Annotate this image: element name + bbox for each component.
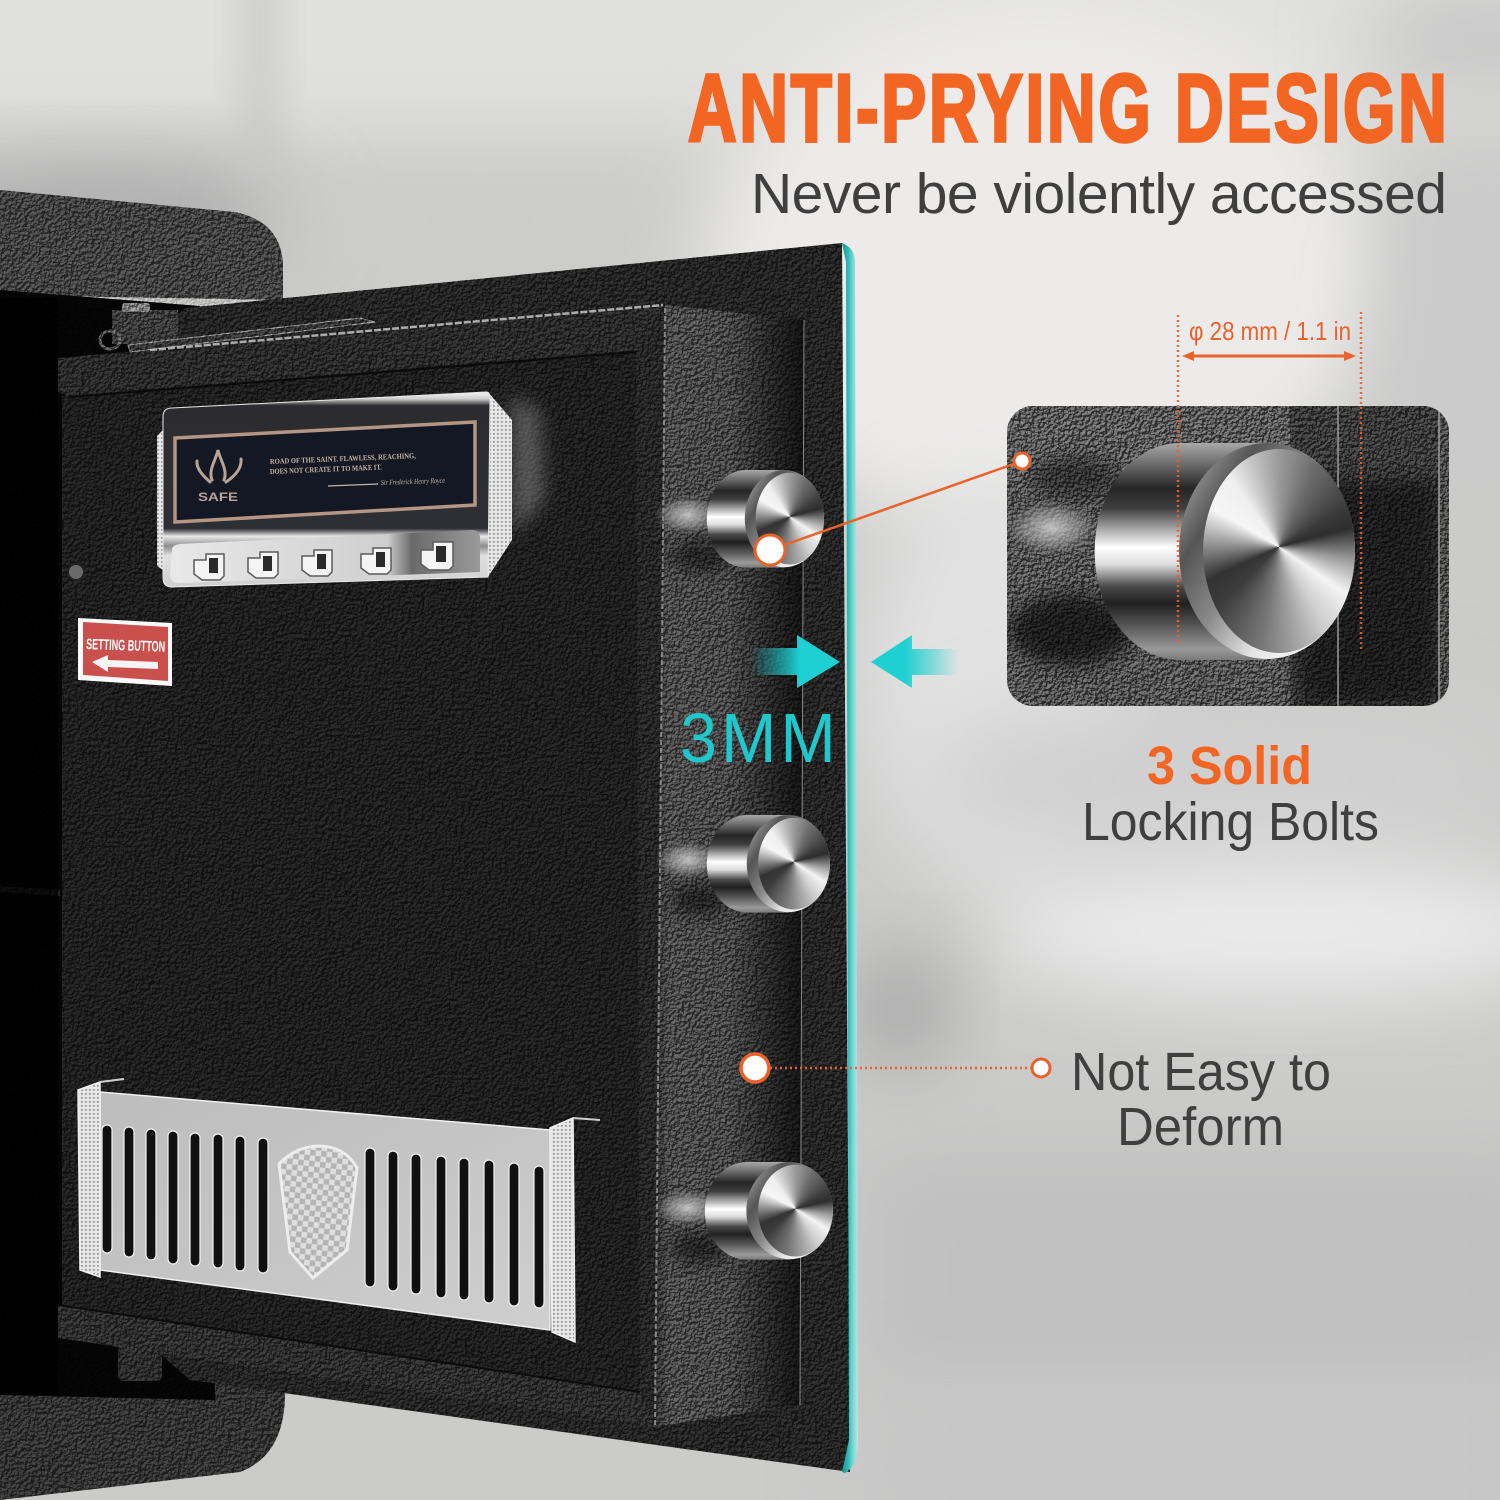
door box frame right — [636, 305, 663, 1427]
callout: not easy to deform — [741, 1042, 1331, 1157]
door box front panel — [62, 350, 640, 1392]
bolt smears on side face — [654, 495, 730, 1263]
steel plate — [100, 1092, 550, 1330]
bolt detail panel — [1004, 406, 1450, 706]
large bolt — [1095, 443, 1355, 660]
glare on door around plate — [510, 396, 545, 535]
hammered texture — [0, 180, 860, 1500]
crown logo — [197, 450, 241, 482]
teal door edge — [842, 243, 858, 1473]
left end cap — [78, 1082, 100, 1277]
dark label — [175, 422, 475, 522]
signature: Sir Frederick Henry Royce — [381, 476, 446, 487]
callout: not easy to deform: Not Easy to — [1071, 1042, 1331, 1102]
locking bolts label: Locking Bolts — [1082, 792, 1379, 852]
door box side face — [653, 305, 804, 1427]
title: ANTI-PRYING DESIGN — [688, 54, 1447, 162]
motto text: DOES NOT CREATE IT TO MAKE IT. — [270, 463, 382, 476]
panel base — [1007, 406, 1290, 706]
interior shade — [0, 298, 58, 1395]
thickness arrows — [750, 635, 959, 688]
signature — [328, 476, 446, 487]
plate left knurl — [157, 430, 163, 570]
door plate — [150, 243, 850, 1472]
3MM label: 3MM — [680, 699, 836, 777]
subtitle: Never be violently accessed — [751, 162, 1447, 226]
side screw — [68, 564, 84, 580]
lower hinge — [118, 1345, 162, 1381]
safe body back bottom — [0, 1372, 285, 1500]
setting button sticker: SETTING BUTTON — [86, 636, 165, 656]
locking bolts label — [1082, 736, 1379, 852]
panel lighting — [1007, 406, 1450, 706]
setting button sticker — [78, 618, 172, 686]
nameplate — [157, 392, 545, 587]
right end cap — [550, 1118, 575, 1342]
SAFE logo text: SAFE — [198, 490, 238, 504]
motto text: ROAD OF THE SAINT. FLAWLESS, REACHING, — [270, 451, 416, 466]
plate right knurl — [488, 392, 512, 577]
interior shelf — [0, 886, 60, 896]
door box bottom flange — [58, 1305, 655, 1427]
callout line to bolt detail — [755, 453, 1030, 565]
panel texture — [1007, 406, 1449, 706]
upper hinge — [100, 303, 178, 349]
callout: not easy to deform: Deform — [1117, 1097, 1284, 1157]
safe body back top — [0, 190, 283, 300]
safe interior — [0, 290, 215, 1400]
locking bolts label: 3 Solid — [1147, 736, 1312, 796]
dimension: diameter: φ 28 mm / 1.1 in — [1189, 316, 1351, 346]
vent plate — [78, 1079, 600, 1342]
top bar — [128, 318, 375, 352]
motto text — [270, 451, 416, 476]
highlight edges — [58, 305, 804, 1425]
keypad buttons — [194, 542, 453, 580]
locking bolt 3 — [705, 1162, 833, 1260]
panel seams — [1338, 406, 1439, 706]
locking bolt 1 — [707, 470, 824, 568]
dimension: diameter — [1178, 312, 1361, 650]
right vent slots — [365, 1148, 544, 1308]
chrome plate — [163, 392, 490, 587]
safe illustration — [0, 180, 860, 1500]
shield emblem — [279, 1146, 357, 1278]
left vent slots — [102, 1125, 268, 1273]
key band — [170, 530, 480, 583]
locking bolt 2 — [707, 815, 830, 913]
cap hooks — [100, 1079, 600, 1120]
door box top surface — [58, 305, 663, 397]
panel smear — [1008, 503, 1096, 554]
